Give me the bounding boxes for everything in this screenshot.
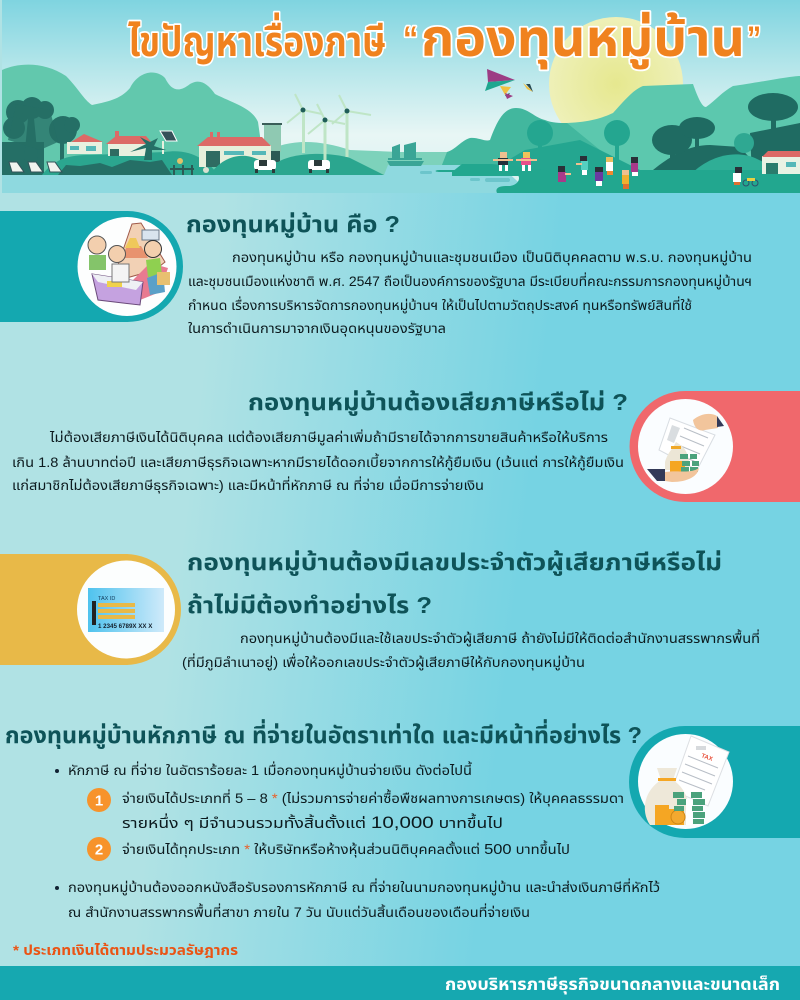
section 3 icon band <box>0 554 181 665</box>
bullet two: ณ สำนักงานสรรพากรพื้นที่สาขา ภายใน 7 วัน นับแต่วันสิ้นเดือนของเดือนที่จ่ายเงิน <box>68 903 530 920</box>
numbered item 2: จ่ายเงินได้ทุกประเภท * ให้บริษัทหรือห้างหุ้นส่วนนิติบุคคลตั้งแต่ 500 บาทขึ้นไป <box>122 840 570 858</box>
bullet two <box>55 878 660 920</box>
solar panel <box>160 131 177 154</box>
dark trees right <box>647 93 800 175</box>
green bush right <box>690 154 790 175</box>
body text: กำหนด เรื่องการบริหารจัดการกองทุนหมู่บ้านฯ ให้เป็นไปตามวัตถุประสงค์ ทุนหรือทรัพย์สินที่ใช้ <box>188 296 692 314</box>
heading: กองทุนหมู่บ้านต้องมีเลขประจำตัวผู้เสียภาษีหรือไม่ <box>187 549 722 576</box>
numbered item 1: จ่ายเงินได้ประเภทที่ 5 – 8 * (ไม่รวมการจ่ายค่าซื้อพืชผลทางการเกษตร) ให้บุคคลธรรมดา <box>122 789 624 807</box>
body text <box>188 249 752 337</box>
body text: แก่สมาชิกไม่ต้องเสียภาษีธุรกิจเฉพาะ) และมีหน้าที่หักภาษี ณ ที่จ่าย เมื่อมีการจ่ายเงิน <box>12 476 484 494</box>
body text: เกิน 1.8 ล้านบาทต่อปี และเสียภาษีธุรกิจเฉพาะหากมีรายได้ดอกเบี้ยจากการให้กู้ยืมเงิน (เว้นแต่ การให้กู้ยืมเงิน <box>12 453 624 471</box>
body text: กองทุนหมู่บ้านต้องมีและใช้เลขประจำตัวผู้เสียภาษี ถ้ายังไม่มีให้ติดต่อสำนักงานสรรพากรพื้นที่ <box>240 629 760 647</box>
icon: people at a market stall <box>88 223 170 305</box>
children <box>493 152 758 189</box>
small house 1 <box>67 134 103 154</box>
heading line two: ถ้าไม่มีต้องทำอย่างไร ? <box>187 592 432 618</box>
far hills left <box>2 65 300 175</box>
mid hills right <box>440 108 640 175</box>
body text: กองทุนหมู่บ้าน หรือ กองทุนหมู่บ้านและชุมชนเมือง เป็นนิติบุคคลตาม พ.ร.บ. กองทุนหมู่บ้าน <box>232 249 752 266</box>
far hills right <box>555 76 800 175</box>
body text <box>12 429 624 494</box>
section 2 icon band <box>630 391 800 502</box>
section 1 icon band <box>0 211 183 322</box>
chimney <box>262 123 282 163</box>
panel: withholding tax <box>5 719 800 920</box>
body text <box>182 629 760 671</box>
icon: tax id card: 1 2345 6789X XX X <box>98 623 153 630</box>
large house <box>197 132 271 167</box>
title: ไขปัญหาเรื่องภาษี <box>128 12 386 65</box>
title <box>128 10 761 70</box>
numbered item 1: รายหนึ่ง ๆ มีจำนวนรวมทั้งสิ้นตั้งแต่ 10,000 บาทขึ้นไป <box>122 813 503 832</box>
panel: must the fund pay tax <box>12 389 800 502</box>
water <box>2 165 530 193</box>
boat <box>387 142 424 166</box>
cows <box>254 160 330 173</box>
wind turbines <box>287 94 371 160</box>
right ground <box>436 170 800 193</box>
body text: ไม่ต้องเสียภาษีเงินได้นิติบุคคล แต่ต้องเสียภาษีมูลค่าเพิ่มถ้ามีรายได้จากการขายสินค้าหรือให้บริการ <box>49 429 608 446</box>
distant band <box>265 142 470 175</box>
footnote: * ประเภทเงินได้ตามประมวลรัษฎากร <box>13 942 238 958</box>
left dark trees <box>2 97 80 175</box>
icon: tax id card: TAX ID <box>98 596 115 602</box>
footer band: กองบริหารภาษีธุรกิจขนาดกลางและขนาดเล็ก <box>445 974 780 995</box>
bullet two: กองทุนหมู่บ้านต้องออกหนังสือรับรองการหักภาษี ณ ที่จ่ายในนามกองทุนหมู่บ้าน และนำส่งเงินภาษีที่หักไว้ <box>68 878 660 896</box>
title: “ <box>403 20 418 58</box>
body text: ในการดำเนินการมาจากเงินอุดหนุนของรัฐบาล <box>188 321 446 337</box>
bullet one: หักภาษี ณ ที่จ่าย ในอัตราร้อยละ 1 เมื่อกองทุนหมู่บ้านจ่ายเงิน ดังต่อไปนี้ <box>68 761 472 779</box>
right house <box>762 151 800 174</box>
numbered item 1 <box>87 788 624 832</box>
body text: (ที่มีภูมิลำเนาอยู่) เพื่อให้ออกเลขประจำตัวผู้เสียภาษีให้กับกองทุนหมู่บ้าน <box>182 653 585 671</box>
mid-green mound left <box>42 151 218 175</box>
palm tree <box>130 137 166 160</box>
title: กองทุนหมู่บ้าน <box>421 10 745 70</box>
small solar panels <box>9 162 62 172</box>
small house 2 <box>106 131 153 156</box>
icon: money bag with tax form <box>645 736 729 825</box>
icon: money bag with tax form: TAX <box>700 753 713 763</box>
heading: กองทุนหมู่บ้านต้องเสียภาษีหรือไม่ ? <box>248 389 628 416</box>
panel: taxpayer id <box>0 549 760 671</box>
panel: what is the village fund <box>0 211 752 337</box>
icon: tax id card <box>88 588 164 632</box>
heading: กองทุนหมู่บ้านหักภาษี ณ ที่จ่ายในอัตราเท่าใด และมีหน้าที่อย่างไร ? <box>5 719 642 749</box>
foreground hill with windmills <box>210 154 384 175</box>
icon: hands exchanging tax form and money <box>647 414 724 482</box>
numbered item 2 <box>87 837 570 861</box>
body text: และชุมชนเมืองแห่งชาติ พ.ศ. 2547 ถือเป็นองค์การของรัฐบาล มีระเบียบที่คณะกรรมการกองทุนหมู่บ้านฯ <box>188 272 752 290</box>
section 4 icon band <box>629 726 800 838</box>
fence and rooster <box>170 158 209 175</box>
kite <box>485 69 533 99</box>
footer band <box>0 966 800 1000</box>
numbered item 1: 1 <box>95 792 103 810</box>
title: ” <box>747 20 761 58</box>
banner illustration <box>2 0 800 193</box>
heading: กองทุนหมู่บ้าน คือ ? <box>186 211 400 238</box>
numbered item 2: 2 <box>95 842 103 858</box>
dark bushes <box>58 160 172 175</box>
right mounds and trees <box>500 120 650 175</box>
